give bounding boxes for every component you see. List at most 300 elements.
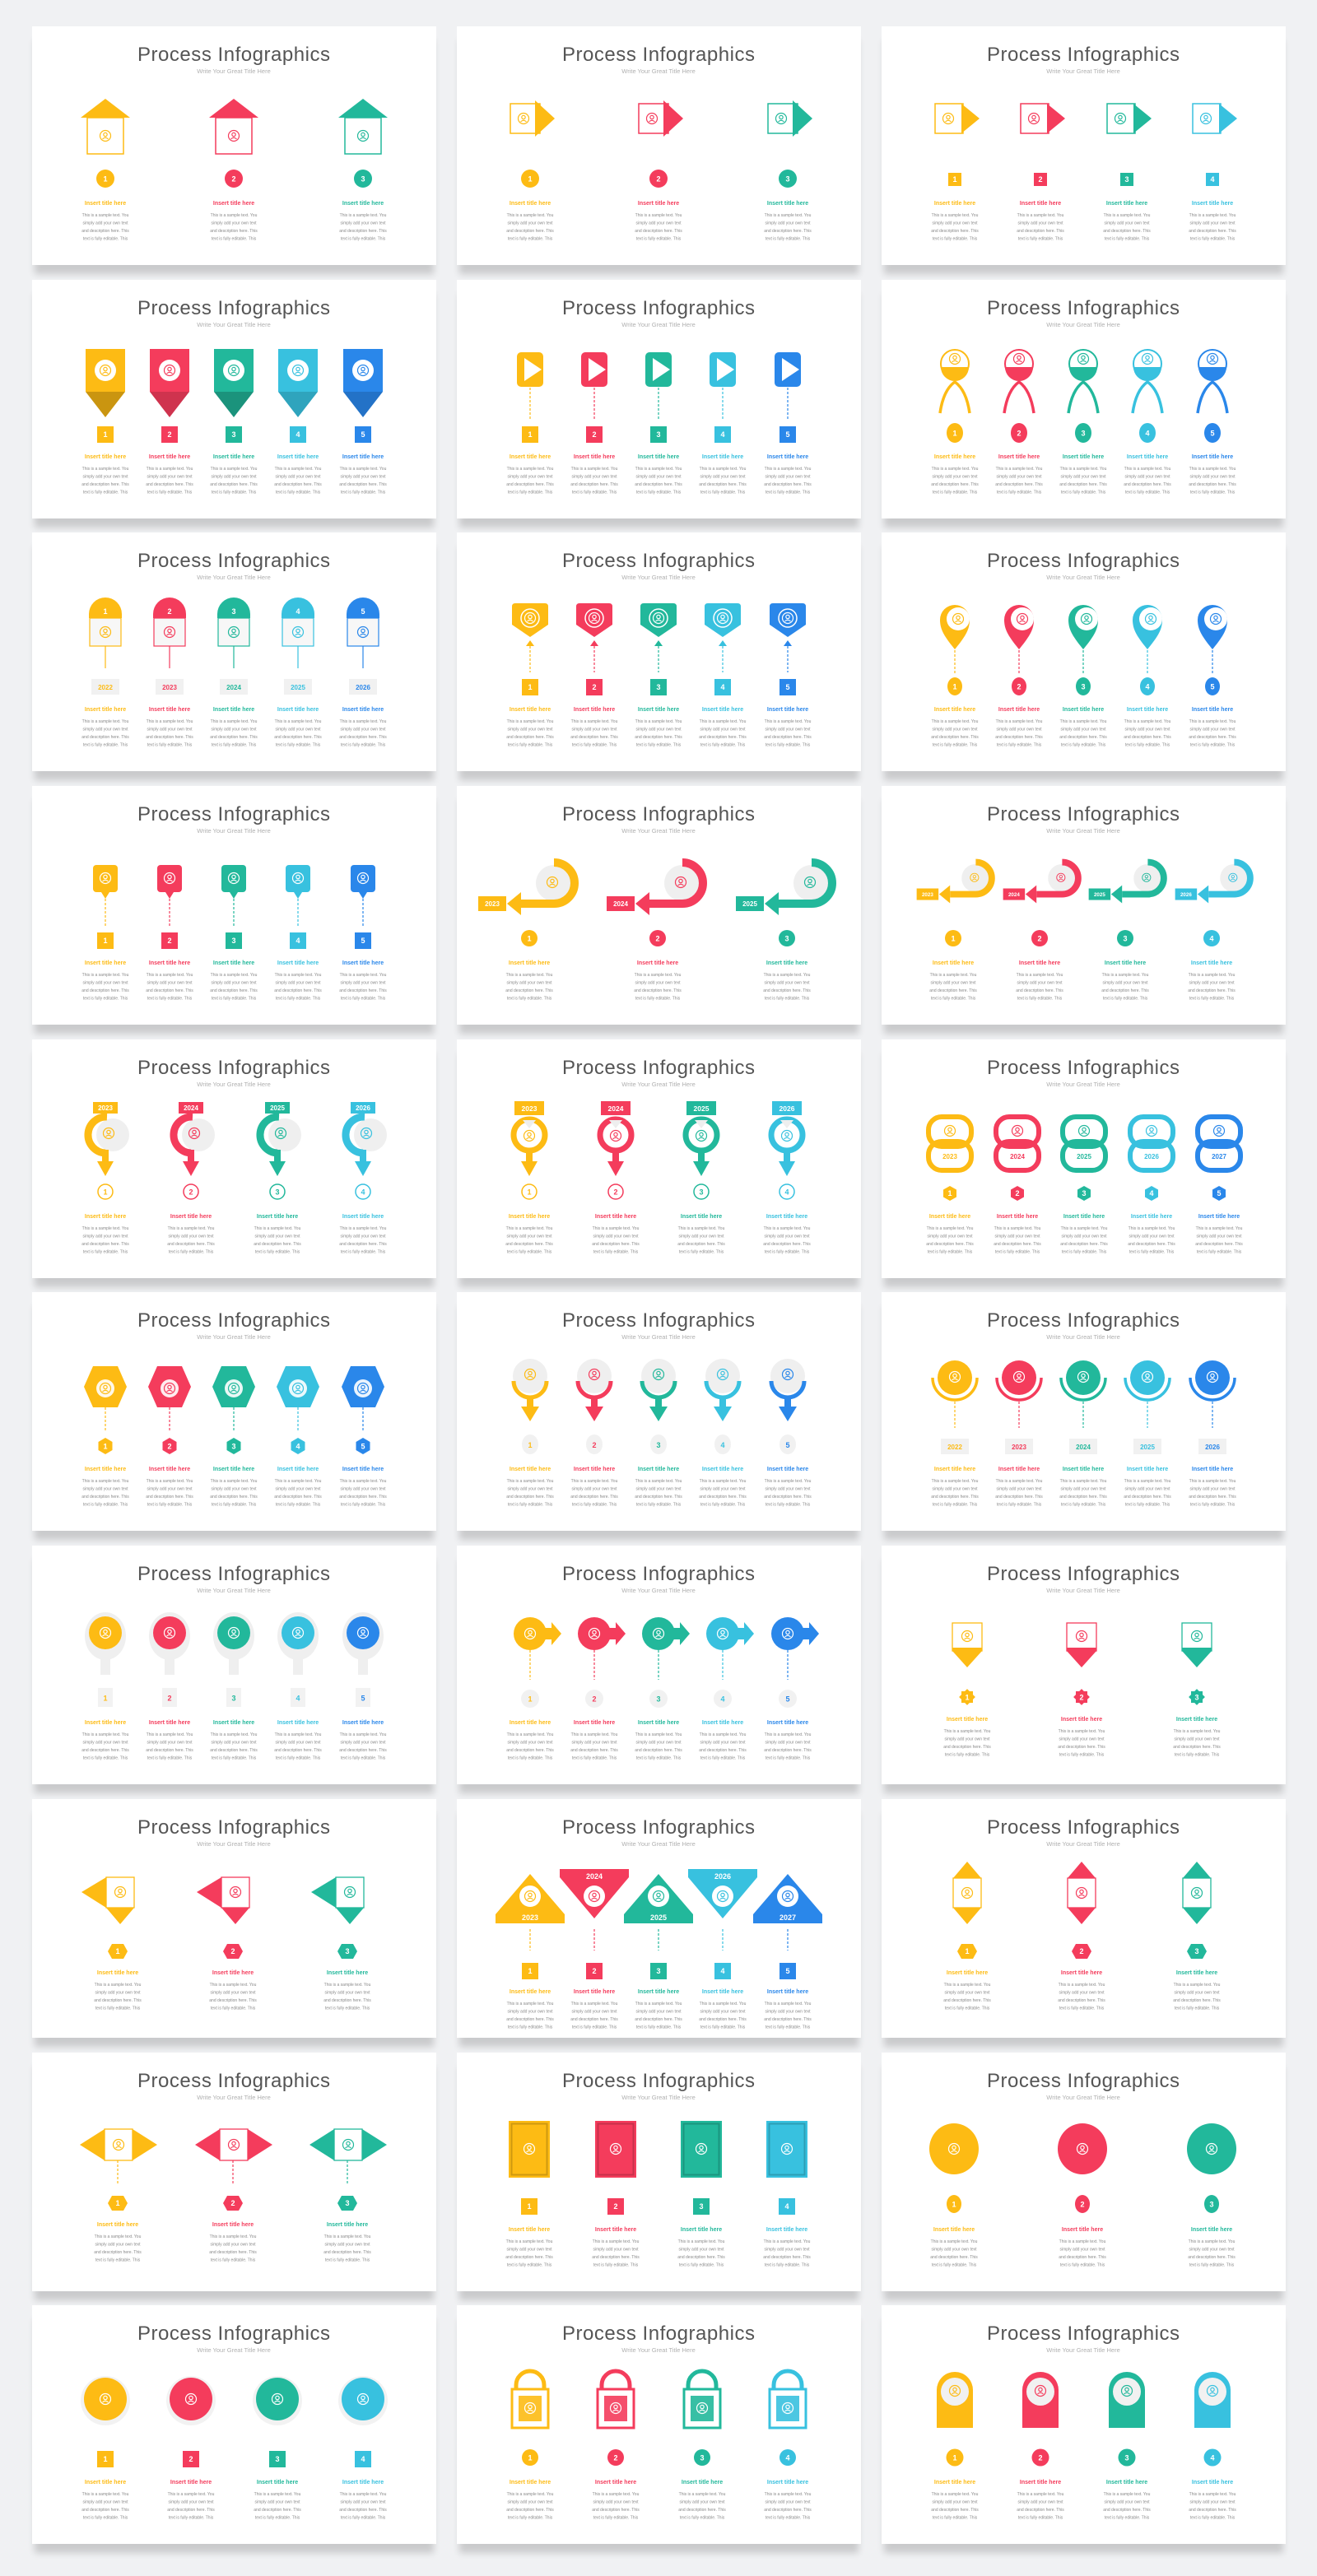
step 2: Insert title here xyxy=(170,2480,212,2485)
step 3: This is a sample text. You xyxy=(1060,719,1107,724)
step 1: Insert title here xyxy=(510,1467,551,1472)
step 4: This is a sample text. You xyxy=(1124,467,1171,472)
step 1: and description here. This xyxy=(929,988,977,993)
step 2 xyxy=(570,1359,618,1508)
step 1: This is a sample text. You xyxy=(506,2239,553,2244)
step 4: and description here. This xyxy=(1124,1495,1171,1500)
step 1: simply add your own text xyxy=(82,2500,128,2505)
step 1: This is a sample text. You xyxy=(927,1226,974,1231)
step 1: simply add your own text xyxy=(82,981,128,986)
panel: slide 18 circles with arcs and years xyxy=(882,1292,1286,1531)
step 5: This is a sample text. You xyxy=(765,467,812,472)
step 3: and description here. This xyxy=(635,1748,682,1753)
step 5: text is fully editable. This xyxy=(341,1503,386,1508)
step 1: and description here. This xyxy=(943,1998,991,2003)
step 2: and description here. This xyxy=(146,735,193,740)
step 1 xyxy=(80,2129,157,2263)
heading: Write Your Great Title Here xyxy=(197,2346,271,2354)
step 3: This is a sample text. You xyxy=(211,1479,258,1484)
step 3: Insert title here xyxy=(213,1720,254,1726)
step 5: Insert title here xyxy=(342,1720,384,1726)
heading: Write Your Great Title Here xyxy=(197,321,271,328)
step 1: 1 xyxy=(528,1695,533,1704)
step 1 xyxy=(81,2376,130,2520)
heading: Write Your Great Title Here xyxy=(621,1840,696,1848)
step 4: text is fully editable. This xyxy=(700,2025,746,2030)
step 1: and description here. This xyxy=(506,482,554,487)
step 1: and description here. This xyxy=(505,988,553,993)
step 2 xyxy=(146,865,193,1001)
step 2 xyxy=(209,99,258,242)
step 2: simply add your own text xyxy=(571,1740,617,1745)
step 1: text is fully editable. This xyxy=(507,996,552,1001)
step 3: Insert title here xyxy=(1105,960,1146,966)
step 1: text is fully editable. This xyxy=(83,491,128,495)
panel: slide 26 tall rectangles xyxy=(457,2053,861,2291)
step 4 xyxy=(764,2371,812,2520)
step 4: simply add your own text xyxy=(340,2500,386,2505)
step 4 xyxy=(699,352,747,495)
step 3: 2025 xyxy=(650,1913,667,1922)
step 2 xyxy=(607,863,703,1001)
step 3 xyxy=(635,352,682,495)
step 2: Insert title here xyxy=(170,1214,212,1220)
step 1 xyxy=(931,104,980,242)
step 3 xyxy=(311,1877,371,2011)
step 2: text is fully editable. This xyxy=(593,2515,639,2520)
step 3: Insert title here xyxy=(327,1970,368,1976)
step 1: 1 xyxy=(103,1188,108,1197)
step 1: and description here. This xyxy=(94,2250,142,2255)
step 1: and description here. This xyxy=(926,1242,974,1247)
step 1: text is fully editable. This xyxy=(83,742,128,747)
step 3: This is a sample text. You xyxy=(1189,2239,1236,2244)
step 2: 2024 xyxy=(586,1872,603,1881)
step 3: This is a sample text. You xyxy=(211,973,258,978)
step 2: Insert title here xyxy=(574,454,615,460)
step 3: and description here. This xyxy=(764,229,812,234)
step 2: and description here. This xyxy=(1059,2255,1106,2260)
step 2: simply add your own text xyxy=(1017,981,1063,986)
step 1: text is fully editable. This xyxy=(83,996,128,1001)
step 2: and description here. This xyxy=(995,735,1043,740)
step 4 xyxy=(763,1101,811,1254)
step 2: text is fully editable. This xyxy=(1060,2263,1105,2268)
step 5: 5 xyxy=(785,683,790,691)
step 2: 2 xyxy=(167,937,172,945)
step 4: and description here. This xyxy=(699,1748,747,1753)
step 2: This is a sample text. You xyxy=(147,1732,193,1737)
step 2: text is fully editable. This xyxy=(147,742,193,747)
step 4: text is fully editable. This xyxy=(276,1756,321,1761)
step 3 xyxy=(635,1359,682,1508)
step 3: Insert title here xyxy=(1176,1970,1217,1976)
step 4: 4 xyxy=(1145,430,1150,438)
step 1: Insert title here xyxy=(934,707,975,713)
step 1: text is fully editable. This xyxy=(932,2263,977,2268)
step 1: Insert title here xyxy=(510,1720,551,1726)
step 4: simply add your own text xyxy=(1189,221,1236,226)
step 1 xyxy=(81,598,129,747)
step 4: This is a sample text. You xyxy=(275,1732,322,1737)
step 4: text is fully editable. This xyxy=(1189,996,1235,1001)
step 1: This is a sample text. You xyxy=(932,467,979,472)
step 1: text is fully editable. This xyxy=(508,742,553,747)
step 3: text is fully editable. This xyxy=(679,2263,724,2268)
step 2: This is a sample text. You xyxy=(635,973,682,978)
step 1 xyxy=(81,99,130,242)
step 3: This is a sample text. You xyxy=(635,467,682,472)
panel: slide 7 dome tabs with years xyxy=(32,532,436,771)
step 1: and description here. This xyxy=(506,1495,554,1500)
step 4 xyxy=(274,349,322,495)
step 4: This is a sample text. You xyxy=(275,973,322,978)
step 2: text is fully editable. This xyxy=(635,996,681,1001)
step 1: simply add your own text xyxy=(82,221,128,226)
step 3: This is a sample text. You xyxy=(1104,213,1151,218)
step 4: simply add your own text xyxy=(764,1235,810,1239)
panel: slide 20 circles with right arrows xyxy=(457,1546,861,1784)
step 1: simply add your own text xyxy=(82,474,128,479)
step 1 xyxy=(81,1612,129,1761)
step 5: 2027 xyxy=(1212,1153,1226,1160)
step 4: 4 xyxy=(1145,683,1150,691)
step 5: This is a sample text. You xyxy=(340,719,387,724)
step 2: text is fully editable. This xyxy=(572,742,617,747)
step 1: Insert title here xyxy=(510,1989,551,1995)
step 2: text is fully editable. This xyxy=(147,996,193,1001)
step 3 xyxy=(210,1612,258,1761)
panel: slide 30 dome tabs xyxy=(882,2305,1286,2544)
step 4: Insert title here xyxy=(702,1720,743,1726)
step 2: and description here. This xyxy=(1017,229,1064,234)
step 2: 2 xyxy=(655,935,660,943)
step 1: This is a sample text. You xyxy=(507,467,554,472)
step 1: text is fully editable. This xyxy=(933,2515,978,2520)
step 1: This is a sample text. You xyxy=(82,213,129,218)
step 5: 5 xyxy=(785,1695,790,1704)
step 2: and description here. This xyxy=(167,2508,215,2513)
step 5: 5 xyxy=(1217,1189,1222,1197)
step 4 xyxy=(274,1612,322,1761)
step 2: This is a sample text. You xyxy=(1059,1729,1105,1734)
step 4: text is fully editable. This xyxy=(276,1503,321,1508)
step 3: This is a sample text. You xyxy=(764,973,811,978)
step 5: and description here. This xyxy=(764,1748,812,1753)
step 2: text is fully editable. This xyxy=(1059,1753,1105,1758)
heading: Process Infographics xyxy=(137,44,330,66)
step 3: Insert title here xyxy=(257,1214,298,1220)
step 1: simply add your own text xyxy=(95,1990,141,1995)
step 4: Insert title here xyxy=(1127,1467,1168,1472)
step 3 xyxy=(1059,350,1107,495)
step 2: This is a sample text. You xyxy=(210,2234,257,2239)
step 3: and description here. This xyxy=(1188,2255,1236,2260)
step 4: Insert title here xyxy=(277,707,319,713)
step 2: simply add your own text xyxy=(593,1235,639,1239)
step 2 xyxy=(995,605,1043,747)
step 5: and description here. This xyxy=(339,1495,387,1500)
step 2: text is fully editable. This xyxy=(169,2515,214,2520)
step 3 xyxy=(677,1101,725,1254)
step 3: and description here. This xyxy=(1060,1242,1108,1247)
step 5: This is a sample text. You xyxy=(340,973,387,978)
step 3: Insert title here xyxy=(682,2480,723,2485)
step 2: text is fully editable. This xyxy=(995,1249,1040,1254)
step 1: Insert title here xyxy=(509,960,550,966)
step 5: simply add your own text xyxy=(1196,1235,1242,1239)
step 1: text is fully editable. This xyxy=(945,1753,990,1758)
step 3: 3 xyxy=(699,1188,704,1197)
step 5: 5 xyxy=(361,937,365,945)
step 1: simply add your own text xyxy=(507,728,553,732)
step 5: and description here. This xyxy=(764,482,812,487)
step 3: Insert title here xyxy=(638,1989,679,1995)
step 1: This is a sample text. You xyxy=(944,1983,991,1988)
step 2: text is fully editable. This xyxy=(997,1503,1042,1508)
step 4: text is fully editable. This xyxy=(1129,1249,1175,1254)
step 1: 1 xyxy=(528,1441,533,1449)
step 1 xyxy=(506,1617,561,1761)
step 5: simply add your own text xyxy=(1189,728,1236,732)
step 1: Insert title here xyxy=(934,1467,975,1472)
step 5: Insert title here xyxy=(767,1989,808,1995)
panel: slide 22 kite arrows left xyxy=(32,1799,436,2038)
step 2: simply add your own text xyxy=(147,728,193,732)
step 5: 5 xyxy=(361,607,365,616)
step 4: and description here. This xyxy=(1189,2508,1236,2513)
step 4: and description here. This xyxy=(274,482,322,487)
step 4: This is a sample text. You xyxy=(765,2492,812,2497)
step 1: 1 xyxy=(103,430,108,439)
step 1: and description here. This xyxy=(81,1495,129,1500)
step 1: text is fully editable. This xyxy=(928,1249,973,1254)
step 3: 3 xyxy=(1209,2201,1214,2209)
step 1: 1 xyxy=(952,683,957,691)
step 3: 2025 xyxy=(742,900,757,908)
step 2: This is a sample text. You xyxy=(1017,973,1063,978)
heading: Write Your Great Title Here xyxy=(1046,1081,1120,1088)
step 3: simply add your own text xyxy=(635,2010,682,2015)
heading: Process Infographics xyxy=(562,1816,755,1839)
step 4: This is a sample text. You xyxy=(275,719,322,724)
step 4: text is fully editable. This xyxy=(1125,491,1170,495)
step 4: text is fully editable. This xyxy=(700,1503,746,1508)
step 2: This is a sample text. You xyxy=(571,2002,618,2006)
step 1: Insert title here xyxy=(85,2480,126,2485)
step 3: Insert title here xyxy=(681,2227,722,2233)
step 1: 1 xyxy=(528,683,533,691)
step 4: simply add your own text xyxy=(275,1740,321,1745)
step 4: 4 xyxy=(296,607,300,616)
step 4: and description here. This xyxy=(339,2508,387,2513)
step 3: simply add your own text xyxy=(324,1990,370,1995)
step 2: This is a sample text. You xyxy=(593,2492,640,2497)
step 4: Insert title here xyxy=(702,454,743,460)
step 2: text is fully editable. This xyxy=(572,1756,617,1761)
step 3: and description here. This xyxy=(210,1748,258,1753)
step 1: 2023 xyxy=(485,900,500,908)
step 4: text is fully editable. This xyxy=(341,1249,386,1254)
step 2: and description here. This xyxy=(592,1242,640,1247)
step 3 xyxy=(1059,605,1107,747)
step 1: Insert title here xyxy=(934,201,975,207)
step 1: simply add your own text xyxy=(932,221,978,226)
step 3: Insert title here xyxy=(638,707,679,713)
heading: Process Infographics xyxy=(137,803,330,825)
step 2: and description here. This xyxy=(1058,1745,1105,1750)
step 1: and description here. This xyxy=(81,2508,129,2513)
step 5 xyxy=(753,1874,822,2030)
step 3: simply add your own text xyxy=(635,1486,682,1491)
step 5 xyxy=(339,1612,387,1761)
step 3: This is a sample text. You xyxy=(324,2234,371,2239)
step 1: simply add your own text xyxy=(932,2500,978,2505)
step 1: This is a sample text. You xyxy=(507,213,554,218)
step 2: text is fully editable. This xyxy=(572,491,617,495)
step 4 xyxy=(338,2376,388,2520)
step 3: and description here. This xyxy=(210,482,258,487)
step 4: 4 xyxy=(1210,2454,1215,2462)
step 2: and description here. This xyxy=(634,988,682,993)
step 4: simply add your own text xyxy=(275,474,321,479)
step 2: 2 xyxy=(167,1694,172,1702)
step 2: Insert title here xyxy=(149,1720,190,1726)
step 2 xyxy=(1017,2372,1064,2520)
step 2: Insert title here xyxy=(212,2222,254,2228)
step 5: 5 xyxy=(785,1967,790,1975)
step 4: simply add your own text xyxy=(1124,728,1170,732)
step 4: 4 xyxy=(1209,935,1214,943)
step 1: Insert title here xyxy=(97,1970,138,1976)
step 2: and description here. This xyxy=(570,1495,618,1500)
heading: Write Your Great Title Here xyxy=(1046,67,1120,75)
step 3: 3 xyxy=(1194,1694,1199,1702)
heading: Write Your Great Title Here xyxy=(1046,321,1120,328)
step 2: 2023 xyxy=(162,684,177,691)
panel: slide 3 four arrow boxes xyxy=(882,26,1286,265)
step 2: simply add your own text xyxy=(996,728,1042,732)
panel: slide 10 small pins xyxy=(32,786,436,1025)
panel: slide 23 alternating triangles xyxy=(457,1799,861,2038)
step 3: and description here. This xyxy=(339,229,387,234)
step 2: and description here. This xyxy=(1058,1998,1105,2003)
step 5: Insert title here xyxy=(342,1467,384,1472)
step 2: This is a sample text. You xyxy=(571,1479,618,1484)
panel: slide 6 hourglass xyxy=(882,280,1286,518)
step 5: and description here. This xyxy=(1189,482,1236,487)
step 1: 1 xyxy=(103,2455,108,2463)
step 2: and description here. This xyxy=(167,1242,215,1247)
heading: Process Infographics xyxy=(562,1309,755,1332)
step 3: and description here. This xyxy=(678,2508,726,2513)
step 2: and description here. This xyxy=(592,2255,640,2260)
step 3: 3 xyxy=(1082,1189,1087,1197)
step 4: text is fully editable. This xyxy=(1190,237,1236,242)
step 3: text is fully editable. This xyxy=(636,1503,682,1508)
step 3: and description here. This xyxy=(1173,1745,1221,1750)
step 3: Insert title here xyxy=(1176,1717,1217,1723)
step 4: Insert title here xyxy=(702,707,743,713)
step 2: simply add your own text xyxy=(635,981,681,986)
step 2: simply add your own text xyxy=(147,1486,193,1491)
step 1: This is a sample text. You xyxy=(507,1732,554,1737)
step 2: Insert title here xyxy=(1061,1970,1102,1976)
step 2: text is fully editable. This xyxy=(572,1503,617,1508)
step 3: and description here. This xyxy=(677,1242,725,1247)
step 1: Insert title here xyxy=(85,960,126,966)
step 1: and description here. This xyxy=(81,988,129,993)
step 4: and description here. This xyxy=(763,1242,811,1247)
step 2: text is fully editable. This xyxy=(997,491,1042,495)
heading: Write Your Great Title Here xyxy=(1046,827,1120,835)
step 3: text is fully editable. This xyxy=(212,996,257,1001)
heading: Write Your Great Title Here xyxy=(621,2346,696,2354)
step 1: simply add your own text xyxy=(507,221,553,226)
step 3: text is fully editable. This xyxy=(636,742,682,747)
step 4: text is fully editable. This xyxy=(700,491,746,495)
step 5: This is a sample text. You xyxy=(340,1732,387,1737)
panel: slide 2 arrow boxes xyxy=(457,26,861,265)
panel: slide 17 cups with down arrows xyxy=(457,1292,861,1531)
step 2: 2024 xyxy=(184,1104,198,1112)
step 2: Insert title here xyxy=(1020,2480,1061,2485)
step 3: Insert title here xyxy=(1063,1467,1104,1472)
step 4: simply add your own text xyxy=(765,2500,811,2505)
step 5: Insert title here xyxy=(342,960,384,966)
step 1: Insert title here xyxy=(510,201,551,207)
step 3: Insert title here xyxy=(257,2480,298,2485)
step 2: text is fully editable. This xyxy=(147,1756,193,1761)
step 3: This is a sample text. You xyxy=(1102,973,1149,978)
step 5: 2026 xyxy=(356,684,370,691)
step 2: simply add your own text xyxy=(211,221,257,226)
step 2: text is fully editable. This xyxy=(572,2025,617,2030)
step 2: simply add your own text xyxy=(147,981,193,986)
step 3: simply add your own text xyxy=(1104,2500,1150,2505)
step 1: 1 xyxy=(965,1694,970,1702)
step 1: 1 xyxy=(103,937,108,945)
step 3 xyxy=(309,2129,387,2263)
step 3: simply add your own text xyxy=(1061,1235,1107,1239)
step 5 xyxy=(339,865,387,1001)
step 5: 2027 xyxy=(779,1913,796,1922)
step 2: 2 xyxy=(1015,1189,1020,1197)
step 2: and description here. This xyxy=(570,735,618,740)
step 3: text is fully editable. This xyxy=(255,1249,300,1254)
step 1: text is fully editable. This xyxy=(508,1756,553,1761)
step 1: Insert title here xyxy=(85,1720,126,1726)
step 1: Insert title here xyxy=(933,2227,975,2233)
step 4: This is a sample text. You xyxy=(700,1479,747,1484)
step 5: and description here. This xyxy=(339,482,387,487)
step 5: 5 xyxy=(361,1694,365,1702)
step 3: text is fully editable. This xyxy=(1103,996,1148,1001)
step 2 xyxy=(146,1366,193,1508)
step 1 xyxy=(496,1874,565,2030)
step 3: This is a sample text. You xyxy=(679,2492,726,2497)
step 4: 4 xyxy=(296,1442,300,1450)
step 1 xyxy=(917,863,992,1001)
step 2: 2 xyxy=(1037,935,1042,943)
step 1: text is fully editable. This xyxy=(95,2006,141,2011)
step 5: simply add your own text xyxy=(765,474,811,479)
step 4: and description here. This xyxy=(1188,988,1236,993)
step 2: and description here. This xyxy=(209,1998,257,2003)
step 4: text is fully editable. This xyxy=(276,491,321,495)
step 1: This is a sample text. You xyxy=(95,2234,142,2239)
step 1: and description here. This xyxy=(943,1745,991,1750)
